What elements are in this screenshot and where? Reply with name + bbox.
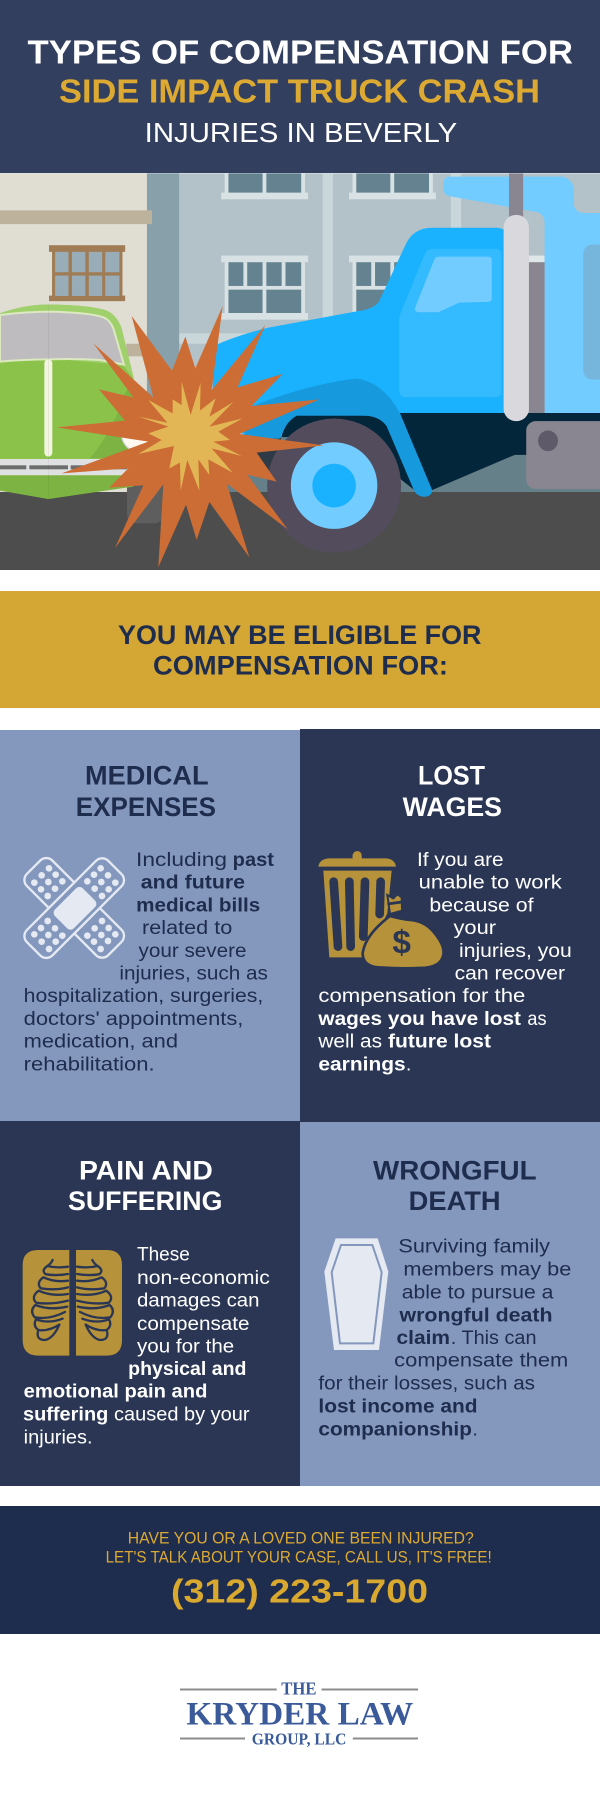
inner burst: [138, 382, 243, 491]
text: wrongful death: lost income and: [318, 1396, 478, 1417]
heading: lost wages: LOST: [418, 760, 485, 790]
text: medical expenses: your severe: [138, 941, 246, 962]
text: pain and suffering: you for the: [137, 1336, 234, 1357]
cab door: [399, 249, 501, 397]
text: lost wages: unable to work: [419, 873, 562, 894]
text: medical expenses: medical bills: [136, 895, 260, 916]
text: wrongful death: Surviving family: [398, 1237, 551, 1258]
banner heading: [118, 620, 482, 681]
text: lost wages: .: [406, 1054, 411, 1075]
panel: wrongful death: [300, 1122, 600, 1486]
text: wrongful death: claim: [396, 1328, 450, 1349]
call to action text: LET'S TALK ABOUT YOUR CASE, CALL US, IT'S FREE!: [106, 1548, 492, 1566]
outer burst: [57, 306, 324, 567]
text: medical expenses: doctors' appointments,: [24, 1009, 243, 1030]
heading: medical expenses: EXPENSES: [76, 792, 216, 822]
text: pain and suffering: injuries.: [24, 1427, 93, 1448]
panel: lost wages: [300, 729, 600, 1122]
text: pain and suffering: emotional pain and: [24, 1382, 207, 1403]
text: medical expenses: and future: [141, 873, 245, 894]
text: pain and suffering: non-economic: [137, 1268, 270, 1289]
text: lost wages: as: [527, 1009, 546, 1030]
panel: pain and suffering: [0, 1121, 300, 1486]
heading: wrongful death: [373, 1155, 537, 1216]
heading: medical expenses: [76, 760, 216, 822]
text: medical expenses: Including: [136, 850, 227, 871]
heading: lost wages: WAGES: [403, 792, 502, 822]
text: lost wages: wages you have lost: [317, 1009, 522, 1030]
text: wrongful death: members may be: [403, 1260, 571, 1281]
cab: [213, 228, 509, 437]
crash illustration: [0, 173, 600, 570]
front wheel: [267, 419, 401, 553]
text: lost wages: future lost: [388, 1032, 492, 1053]
text: lost wages: your: [454, 918, 497, 939]
text: lost wages: compensation for the: [318, 986, 525, 1007]
icon: trash can and money bag: $: [392, 924, 411, 961]
text: lost wages: injuries, you: [459, 941, 572, 962]
truck: [213, 173, 600, 553]
text: lost wages: because of: [429, 895, 534, 916]
call to action panel: [0, 1506, 600, 1634]
explosion: [57, 306, 324, 567]
title line 1: TYPES OF COMPENSATION FOR: [28, 35, 573, 72]
car tire: [127, 484, 164, 523]
trailer: [443, 177, 600, 413]
text: medical expenses: related to: [142, 918, 232, 939]
car bumper: [0, 459, 140, 475]
text: medical expenses: past: [233, 850, 275, 871]
heading: wrongful death: WRONGFUL: [373, 1155, 537, 1185]
text: medical expenses: rehabilitation.: [24, 1054, 155, 1075]
text: medical expenses: medication, and: [24, 1032, 178, 1053]
headlight: [122, 437, 148, 450]
text: medical expenses: hospitalization, surgeries,: [24, 986, 263, 1007]
text: pain and suffering: physical and: [128, 1359, 246, 1380]
text: lost wages: can recover: [455, 964, 566, 984]
text: medical expenses: injuries, such as: [119, 964, 268, 984]
text: medical expenses: [24, 850, 275, 1075]
text: wrongful death: .: [472, 1419, 478, 1440]
text: pain and suffering: damages can: [137, 1291, 260, 1312]
text: lost wages: earnings: [318, 1054, 406, 1075]
text: lost wages: well as: [317, 1032, 382, 1053]
heading: wrongful death: DEATH: [409, 1186, 501, 1216]
windshield: [0, 312, 124, 365]
bumper: [526, 421, 600, 489]
cab window: [415, 257, 492, 312]
text: wrongful death: compensate them: [394, 1351, 568, 1372]
logo: The Kryder Law Group, LLC: THE: [281, 1678, 316, 1698]
phone number: (312) 223-1700: [171, 1573, 428, 1610]
call to action text: HAVE YOU OR A LOVED ONE BEEN INJURED?: [128, 1529, 474, 1547]
text: lost wages: If you are: [417, 850, 504, 871]
icon: crossed bandages: [21, 854, 128, 961]
logo: The Kryder Law Group, LLC: GROUP, LLC: [252, 1729, 346, 1748]
logo: The Kryder Law Group, LLC: [180, 1678, 418, 1748]
eligibility banner: [0, 591, 600, 708]
icon: rib cage: [23, 1250, 122, 1356]
title line 3: INJURIES IN BEVERLY: [145, 117, 458, 148]
banner heading: YOU MAY BE ELIGIBLE FOR: [118, 620, 482, 650]
road: [0, 492, 600, 570]
panel: medical expenses: [0, 730, 300, 1121]
heading: medical expenses: MEDICAL: [85, 760, 209, 790]
fender: [245, 379, 432, 497]
heading: pain and suffering: SUFFERING: [68, 1186, 222, 1216]
text: lost wages: [317, 850, 572, 1075]
text: pain and suffering: [23, 1245, 270, 1448]
text: wrongful death: [318, 1237, 571, 1440]
text: pain and suffering: These: [137, 1245, 190, 1266]
text: wrongful death: able to pursue a: [402, 1282, 554, 1303]
text: wrongful death: companionship: [318, 1419, 472, 1440]
text: wrongful death: . This can: [451, 1328, 536, 1349]
header panel: [0, 0, 600, 173]
heading: pain and suffering: [68, 1155, 222, 1216]
undercarriage: [281, 413, 600, 491]
text: pain and suffering: suffering: [23, 1405, 108, 1426]
heading: lost wages: [403, 760, 502, 822]
banner heading: COMPENSATION FOR:: [153, 651, 448, 681]
hood stripe: [44, 359, 52, 457]
call to action text: [106, 1529, 492, 1566]
icon: coffin: [324, 1238, 388, 1350]
exhaust pipe: [504, 215, 529, 421]
heading: pain and suffering: PAIN AND: [79, 1155, 213, 1185]
title line 2: SIDE IMPACT TRUCK CRASH: [59, 74, 540, 111]
text: wrongful death: for their losses, such as: [318, 1373, 535, 1394]
buildings and windows: [0, 173, 600, 496]
logo: The Kryder Law Group, LLC: KRYDER LAW: [186, 1696, 413, 1732]
text: pain and suffering: compensate: [137, 1314, 250, 1335]
icon: trash can and money bag: [318, 851, 444, 968]
green car: [0, 305, 164, 523]
text: pain and suffering: caused by your: [114, 1405, 250, 1426]
text: wrongful death: wrongful death: [398, 1305, 553, 1326]
